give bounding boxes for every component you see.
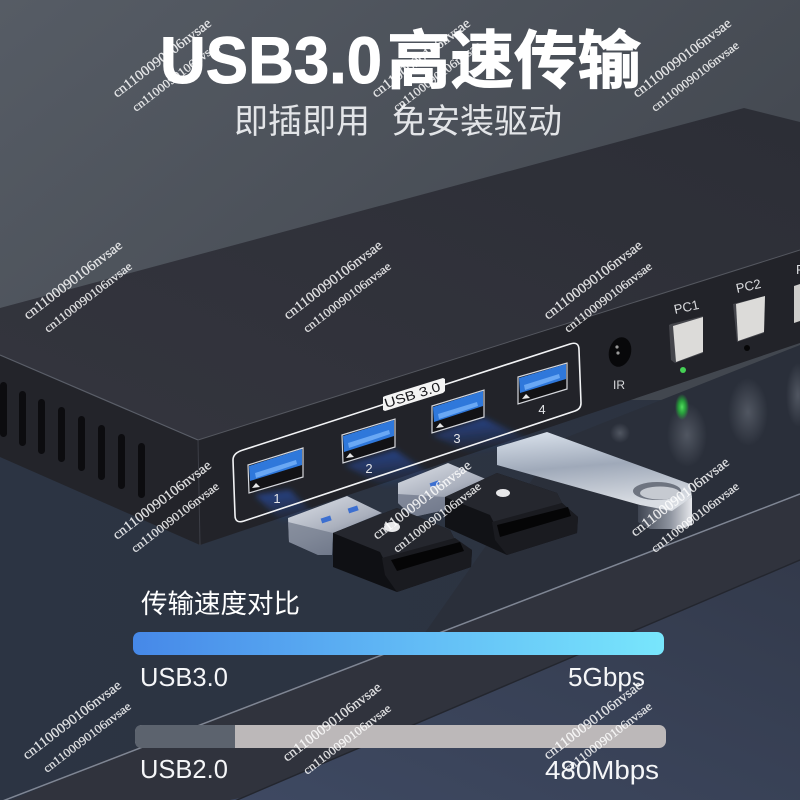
usb dongle right bbox=[398, 463, 578, 555]
watermarks: cn1100090106nvsae bbox=[630, 16, 735, 101]
button pc2: PC2 bbox=[735, 276, 762, 296]
port 1 bbox=[248, 448, 303, 493]
device: KVM switch bbox=[0, 108, 800, 545]
title: USB3.0 bbox=[160, 23, 382, 97]
watermarks: cn1100090106nvsae bbox=[20, 678, 125, 763]
ir jack bbox=[605, 335, 635, 392]
watermarks: cn1100090106nvsae bbox=[21, 238, 126, 323]
chart heading: 传输速度对比 bbox=[141, 589, 300, 619]
watermarks: cn1100090106nvsae bbox=[281, 238, 386, 323]
subtitle: 即插即用 bbox=[234, 103, 370, 141]
watermarks: cn1100090106nvsae bbox=[561, 699, 655, 775]
port numbers bbox=[273, 402, 546, 506]
background wall bbox=[0, 0, 800, 400]
device front face bbox=[198, 250, 800, 545]
speed comparison: usb2.0 bbox=[135, 725, 666, 785]
desk surface bbox=[0, 345, 800, 800]
watermarks: cn1100090106nvsae bbox=[541, 238, 646, 323]
port 4 bbox=[518, 363, 567, 404]
usb3.0 label: USB3.0 bbox=[140, 664, 228, 692]
usb3.0 value: 5Gbps bbox=[568, 664, 645, 692]
device side face with vents bbox=[0, 355, 200, 545]
subtitle: 免安装驱动 bbox=[392, 103, 562, 141]
usb3.0 bar bbox=[133, 632, 664, 655]
usb2.0 bar bbox=[135, 725, 666, 748]
watermarks: cn1100090106nvsae bbox=[40, 699, 134, 775]
watermarks: cn1100090106nvsae bbox=[300, 701, 394, 777]
watermarks: cn1100090106nvsae bbox=[370, 458, 475, 543]
port 3 bbox=[432, 390, 484, 433]
silver usb flash drive bbox=[497, 432, 692, 529]
watermarks: cn1100090106nvsae bbox=[648, 479, 742, 555]
watermarks: cn1100090106nvsae bbox=[110, 458, 215, 543]
watermarks: cn1100090106nvsae bbox=[128, 479, 222, 555]
watermarks: cn1100090106nvsae bbox=[390, 479, 484, 555]
port 2 bbox=[342, 419, 395, 463]
port numbers: 3 bbox=[453, 431, 461, 446]
speed comparison: usb3.0 bbox=[133, 632, 664, 692]
usb 3.0 port panel bbox=[233, 343, 581, 522]
usb2.0 label: USB2.0 bbox=[140, 756, 228, 784]
watermarks: cn1100090106nvsae bbox=[280, 680, 385, 765]
port numbers: 4 bbox=[538, 402, 546, 417]
ir jack: IR bbox=[613, 378, 625, 392]
watermarks: cn1100090106nvsae bbox=[110, 16, 215, 101]
watermarks: cn1100090106nvsae bbox=[369, 16, 474, 101]
title: 高速传输 bbox=[387, 27, 641, 97]
panel outline bbox=[233, 343, 581, 522]
watermarks: cn1100090106nvsae bbox=[648, 38, 742, 114]
device top face bbox=[0, 108, 800, 440]
port numbers: 2 bbox=[365, 461, 373, 476]
watermarks: cn1100090106nvsae bbox=[541, 678, 646, 763]
watermarks: cn1100090106nvsae bbox=[561, 259, 655, 335]
button pc1 bbox=[669, 297, 703, 373]
device reflections on desk bbox=[610, 363, 800, 467]
usb2.0 value: 480Mbps bbox=[545, 757, 659, 785]
light beams from ports bbox=[255, 418, 530, 525]
usb dongle left bbox=[288, 496, 472, 592]
watermarks: cn1100090106nvsae bbox=[41, 259, 135, 335]
watermarks: cn1100090106nvsae bbox=[628, 455, 733, 540]
button pc3 (cropped) bbox=[794, 262, 800, 323]
button pc1: PC1 bbox=[673, 297, 700, 317]
watermarks: cn1100090106nvsae bbox=[129, 38, 223, 114]
button pc2 bbox=[733, 276, 765, 351]
port numbers: 1 bbox=[273, 491, 281, 506]
watermarks: cn1100090106nvsae bbox=[390, 38, 484, 114]
watermarks: cn1100090106nvsae bbox=[300, 259, 394, 335]
usb 3.0 tag: USB 3.0 bbox=[382, 379, 442, 411]
